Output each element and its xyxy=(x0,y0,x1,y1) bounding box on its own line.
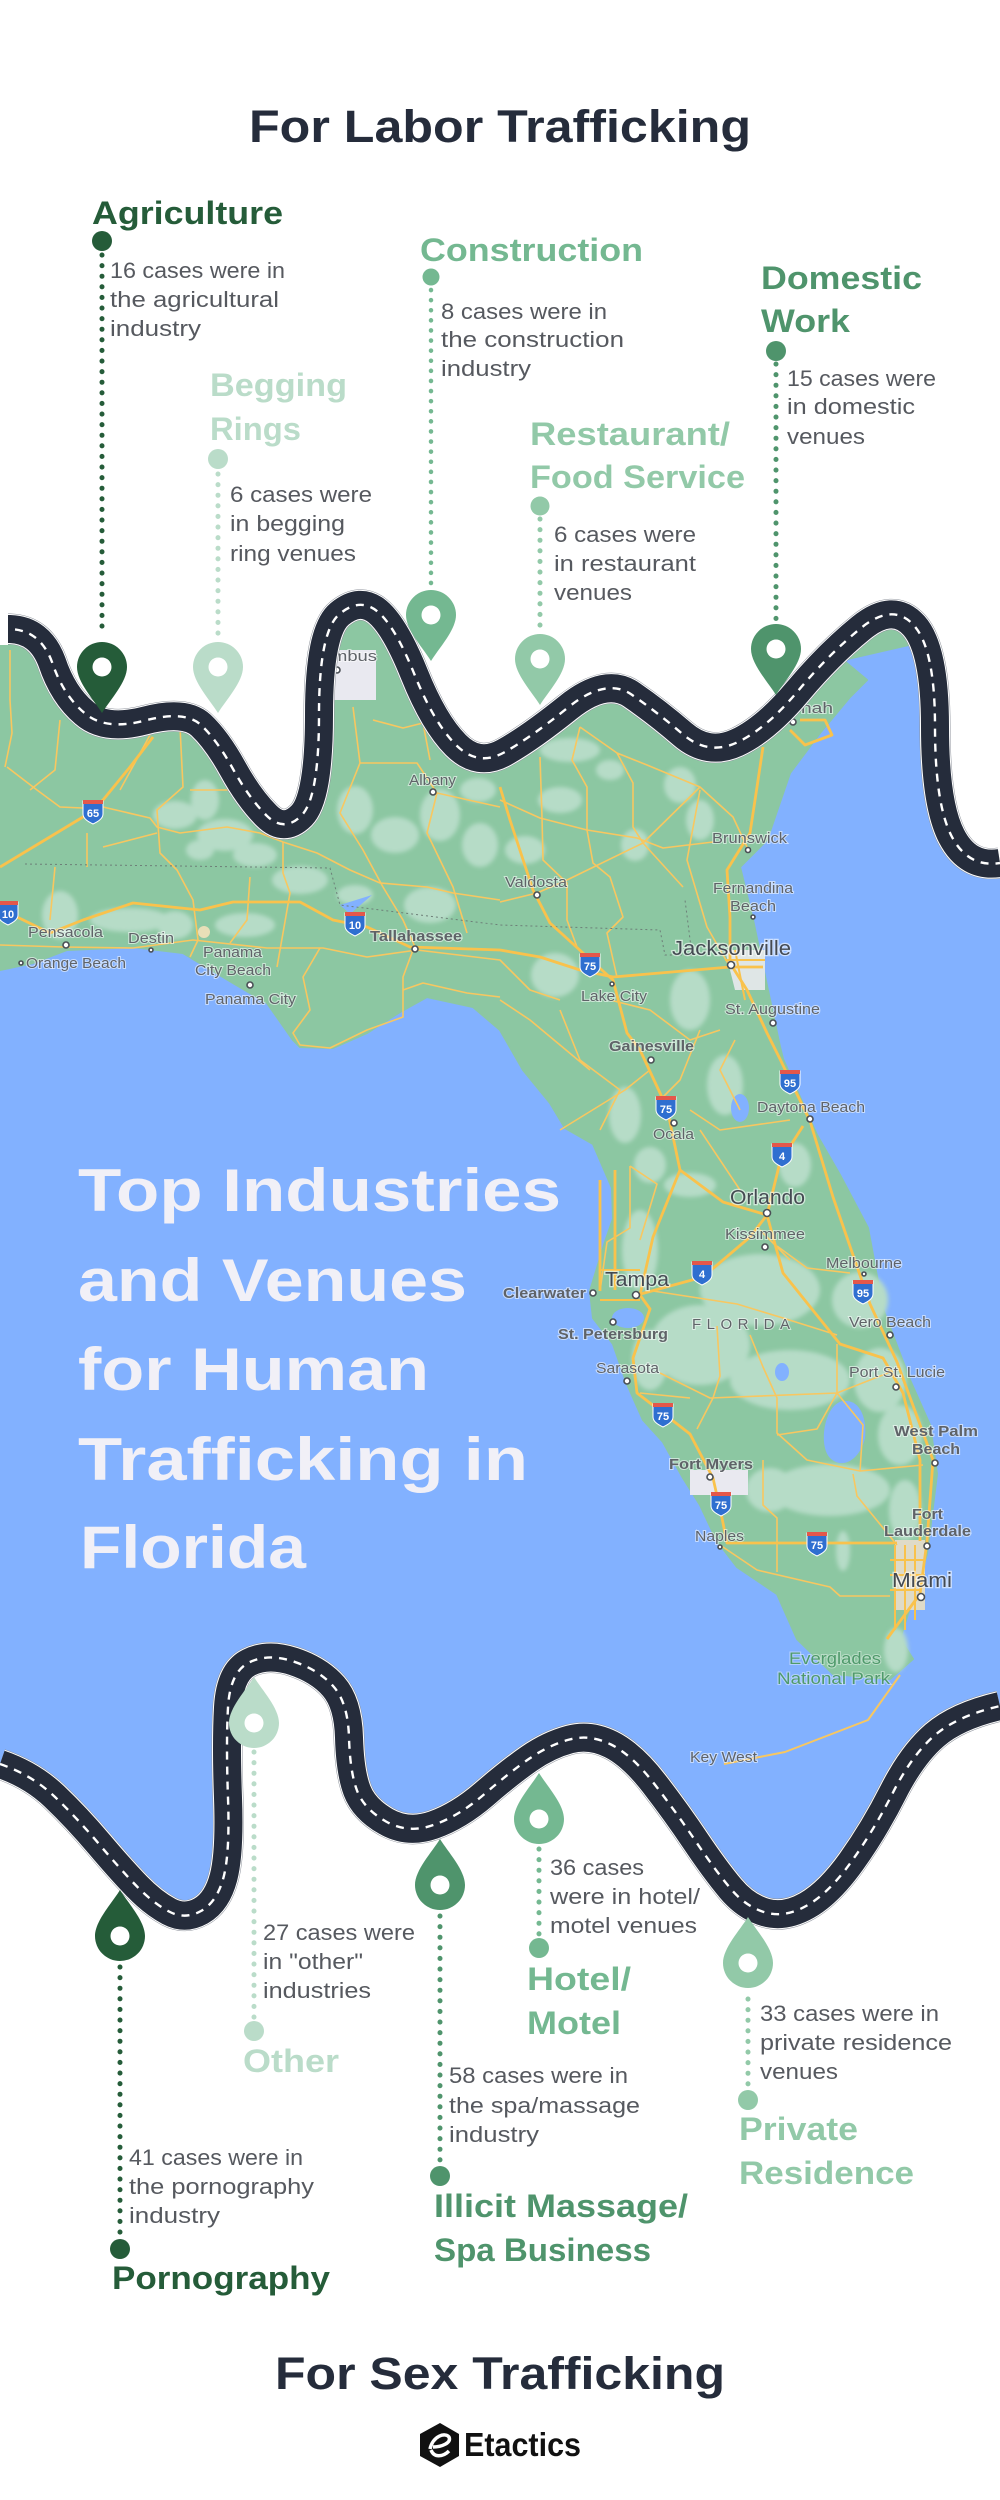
interstate shields: 10 xyxy=(349,920,361,932)
marker: Pornography: 41 cases were in xyxy=(129,2145,303,2170)
interstate shields xyxy=(0,800,873,1556)
map labels: Panama xyxy=(203,944,263,961)
marker: Domestic Work: Work xyxy=(761,303,850,339)
map labels: St. Petersburg xyxy=(558,1326,668,1343)
heading: For Labor Trafficking: For Labor Trafficking xyxy=(249,101,751,152)
marker: Restaurant / Food Service: Restaurant/ xyxy=(530,416,730,452)
main title: for Human xyxy=(78,1336,429,1403)
interstate shields: 10 xyxy=(2,909,14,921)
map labels: Albany xyxy=(409,772,457,789)
map labels: Everglades xyxy=(789,1649,881,1668)
marker: Agriculture: Agriculture xyxy=(92,195,283,231)
marker: Illicit Massage / Spa Business: Illicit Massage/ xyxy=(434,2188,688,2224)
map labels: Valdosta xyxy=(505,874,568,891)
marker: Hotel / Motel: were in hotel/ xyxy=(549,1884,701,1909)
marker: Hotel / Motel: 36 cases xyxy=(550,1855,644,1880)
map labels: Fort xyxy=(912,1506,943,1523)
interstate shields: 95 xyxy=(784,1078,796,1090)
marker: Agriculture: the agricultural xyxy=(110,287,279,312)
map labels: Key West xyxy=(690,1749,758,1766)
map labels: Gainesville xyxy=(609,1038,694,1055)
Lake Okeechobee and inland water xyxy=(340,895,865,1463)
map labels: Beach xyxy=(730,898,776,915)
land mass xyxy=(0,590,937,1679)
map labels: FLORIDA xyxy=(692,1316,790,1333)
logo: Etactics: Etactics xyxy=(464,2426,581,2463)
map labels: Tallahassee xyxy=(370,928,462,945)
lower winding road xyxy=(0,1657,1000,1916)
marker: Pornography: industry xyxy=(129,2203,220,2228)
marker: Agriculture xyxy=(77,195,285,713)
interstates xyxy=(0,720,933,1639)
marker: Private Residence: Private xyxy=(739,2111,858,2147)
left edge trim of the road xyxy=(0,605,8,645)
map labels: Naples xyxy=(695,1528,744,1545)
marker: Construction: industry xyxy=(441,356,531,381)
upper winding road xyxy=(0,605,1000,864)
map labels: Destin xyxy=(128,930,174,947)
heading: For Sex Trafficking: For Sex Trafficking xyxy=(275,2348,725,2399)
map labels: Melbourne xyxy=(826,1255,902,1272)
city patches xyxy=(198,650,925,1610)
map labels: mbus xyxy=(332,648,377,665)
map labels: Fernandina xyxy=(713,880,794,897)
white area above the upper road xyxy=(0,0,1000,864)
map labels: Lake City xyxy=(581,988,648,1005)
map labels: Orlando xyxy=(730,1187,805,1209)
map labels: Ocala xyxy=(653,1126,695,1143)
marker: Private Residence: private residence xyxy=(760,2030,952,2055)
map labels: Port St. Lucie xyxy=(849,1364,945,1381)
marker: Hotel / Motel: Hotel/ xyxy=(527,1961,631,1997)
map labels: Beach xyxy=(912,1441,960,1458)
map labels: Miami xyxy=(892,1570,952,1592)
interstate shields: 75 xyxy=(584,961,596,973)
marker: Other: 27 cases were xyxy=(263,1920,415,1945)
marker: Pornography xyxy=(95,1890,330,2296)
marker: Construction: the construction xyxy=(441,327,624,352)
marker: Agriculture: 16 cases were in xyxy=(110,258,285,283)
map labels: nah xyxy=(801,700,833,717)
interstate shields: 75 xyxy=(660,1104,672,1116)
marker: Hotel / Motel xyxy=(514,1773,701,2041)
marker: Begging Rings: ring venues xyxy=(230,541,356,566)
map labels: Panama City xyxy=(205,991,297,1008)
marker: Hotel / Motel: motel venues xyxy=(550,1913,697,1938)
marker: Domestic Work: Domestic xyxy=(761,260,922,296)
marker: Begging Rings: Rings xyxy=(210,411,301,447)
interstate shields: 65 xyxy=(87,808,99,820)
marker: Restaurant / Food Service xyxy=(515,416,745,705)
map labels: St. Augustine xyxy=(725,1001,820,1018)
marker: Domestic Work xyxy=(751,260,936,695)
main title xyxy=(78,1157,561,1581)
interstate shields: 4 xyxy=(779,1151,786,1163)
map labels: West Palm xyxy=(894,1423,978,1440)
marker: Pornography: the pornography xyxy=(129,2174,314,2199)
marker: Other xyxy=(229,1677,415,2079)
marker: Begging Rings: in begging xyxy=(230,511,345,536)
state border xyxy=(25,864,692,955)
map labels: Pensacola xyxy=(28,924,104,941)
marker: Domestic Work: in domestic xyxy=(787,394,915,419)
marker: Begging Rings xyxy=(193,367,372,713)
marker: Other: Other xyxy=(243,2043,339,2079)
map labels: Brunswick xyxy=(712,830,788,847)
lighter terrain patches xyxy=(42,738,922,1672)
marker: Begging Rings: 6 cases were xyxy=(230,482,372,507)
map labels: Jacksonville xyxy=(672,938,791,960)
marker: Restaurant / Food Service: in restaurant xyxy=(554,551,696,576)
interstate shields: 75 xyxy=(715,1500,727,1512)
map labels xyxy=(26,648,978,1766)
marker: Restaurant / Food Service: Food Service xyxy=(530,459,745,495)
map labels: Fort Myers xyxy=(669,1456,753,1473)
map labels: Tampa xyxy=(605,1269,670,1291)
marker: Private Residence xyxy=(723,1917,952,2191)
map labels: National Park xyxy=(777,1669,891,1688)
map labels: Lauderdale xyxy=(884,1523,971,1540)
road network around Miami xyxy=(600,950,925,1630)
marker: Hotel / Motel: Motel xyxy=(527,2005,621,2041)
logo: Etactics xyxy=(420,2423,581,2467)
marker: Domestic Work: 15 cases were xyxy=(787,366,936,391)
main title: Trafficking in xyxy=(78,1426,528,1493)
map labels: Vero Beach xyxy=(849,1314,931,1331)
minor roads xyxy=(0,650,923,1764)
map labels: Sarasota xyxy=(596,1360,660,1377)
main title: and Venues xyxy=(78,1247,467,1314)
white area below the lower road xyxy=(0,1657,1000,2500)
interstate shields: 75 xyxy=(811,1540,823,1552)
interstate shields: 4 xyxy=(699,1269,706,1281)
map labels: Daytona Beach xyxy=(757,1099,865,1116)
marker: Domestic Work: venues xyxy=(787,424,865,449)
marker: Illicit Massage / Spa Business xyxy=(415,1839,688,2268)
marker: Other: in "other" xyxy=(263,1949,363,1974)
marker: Private Residence: 33 cases were in xyxy=(760,2001,939,2026)
interstate shields: 95 xyxy=(857,1288,869,1300)
marker: Construction xyxy=(406,232,643,661)
marker: Illicit Massage / Spa Business: the spa/massage xyxy=(449,2093,640,2118)
marker: Restaurant / Food Service: venues xyxy=(554,580,632,605)
main title: Top Industries xyxy=(78,1157,561,1224)
marker: Begging Rings: Begging xyxy=(210,367,347,403)
marker: Illicit Massage / Spa Business: industry xyxy=(449,2122,539,2147)
map labels: Clearwater xyxy=(503,1285,586,1302)
city markers xyxy=(19,667,938,1600)
marker: Construction: 8 cases were in xyxy=(441,299,607,324)
map labels: City Beach xyxy=(195,962,271,979)
marker: Other: industries xyxy=(263,1978,371,2003)
marker: Pornography: Pornography xyxy=(112,2260,330,2296)
map labels: Kissimmee xyxy=(725,1226,805,1243)
map of Florida xyxy=(0,590,1000,1990)
marker: Agriculture: industry xyxy=(110,316,201,341)
marker: Private Residence: venues xyxy=(760,2059,838,2084)
map labels: Orange Beach xyxy=(26,955,126,972)
marker: Private Residence: Residence xyxy=(739,2155,914,2191)
main title: Florida xyxy=(80,1514,307,1581)
marker: Construction: Construction xyxy=(420,232,643,268)
marker: Illicit Massage / Spa Business: Spa Business xyxy=(434,2232,651,2268)
interstate shields: 75 xyxy=(657,1411,669,1423)
marker: Illicit Massage / Spa Business: 58 cases were in xyxy=(449,2063,628,2088)
marker: Restaurant / Food Service: 6 cases were xyxy=(554,522,696,547)
